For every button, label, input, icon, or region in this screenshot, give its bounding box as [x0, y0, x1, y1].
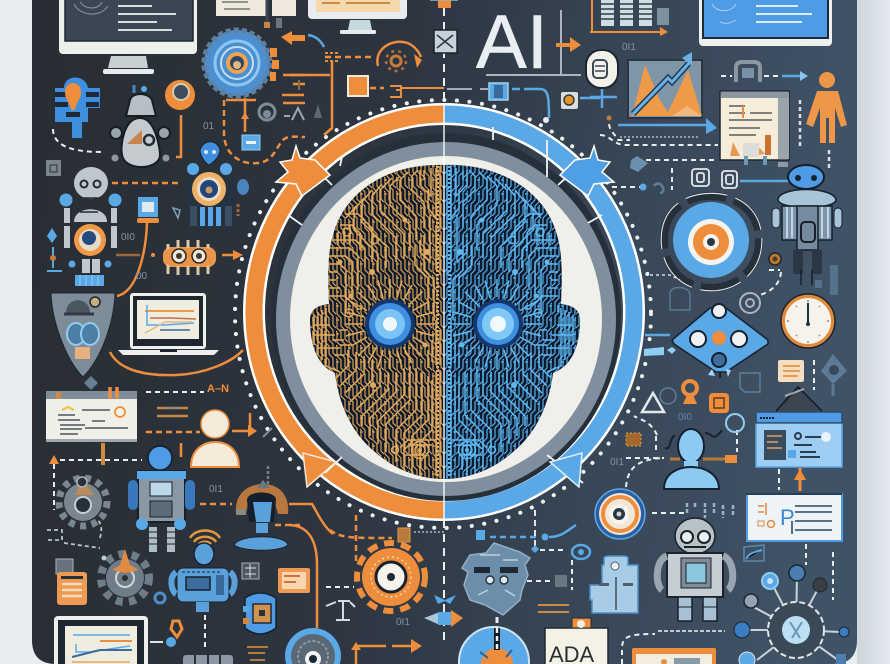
robot: left figure: [47, 167, 135, 286]
orange lines group: [282, 75, 305, 103]
dotted ring around the emblem: [235, 100, 651, 528]
icon: balance: [326, 601, 355, 620]
arrowhead: top right blue: [560, 146, 614, 196]
bar chart: top: [590, 0, 669, 53]
monitor: top centre: [308, 0, 407, 34]
connectors around person: [146, 413, 272, 457]
arrow: beside title: [556, 37, 581, 52]
tile: cream orange: [778, 360, 804, 382]
small dashed path: lower left: [47, 520, 101, 548]
arrowhead: top left orange: [276, 146, 330, 196]
lines: orange: [157, 408, 188, 416]
target: orange: [165, 80, 195, 157]
icon: faint diamond: [821, 354, 847, 396]
icon: small blue chart: [744, 545, 764, 561]
label: 0I1 lower: 0I1: [396, 617, 410, 628]
robot head: blue grey right: [462, 543, 567, 650]
small grey icons and labels: [259, 104, 322, 120]
dashed orange junction: [330, 515, 445, 565]
circuit: right blue half: [444, 160, 584, 485]
gear: grey with orange spike: [101, 549, 165, 603]
circle: small outline: [740, 293, 760, 313]
line: squares to robot: [740, 180, 790, 182]
label: 01: 01: [203, 121, 215, 132]
icon: small grey tile: [46, 160, 61, 176]
curve: under laptop: [110, 350, 243, 375]
icon: small grey table: [242, 563, 259, 579]
box: blue with orange square: [243, 593, 276, 634]
robot: blue right top: [772, 165, 842, 285]
card: white with P: P: [780, 505, 795, 530]
faint icon: pot: [670, 288, 690, 310]
shield: [51, 293, 115, 390]
icon: orange dot tile: [561, 92, 600, 109]
monitor: bottom left: [54, 616, 176, 664]
eye: blue small: [572, 545, 590, 559]
faint icon: right: [815, 265, 838, 295]
chip: small orange: [626, 433, 641, 446]
icon: top orange square: [430, 0, 458, 8]
dashed and arrow between cards: [779, 468, 806, 491]
hub network: [734, 565, 849, 664]
icon: small monitor with curve: [116, 197, 159, 296]
robot: blue bulb icon: [53, 78, 102, 152]
lines: orange blue: [538, 605, 569, 612]
head silhouette: [310, 165, 580, 479]
tile: orange: [709, 393, 729, 413]
squares: above gear: [692, 169, 737, 188]
person: cream: [191, 410, 239, 467]
arrows: bottom orange: [351, 639, 422, 664]
robot: blue with gear: [173, 142, 249, 226]
coin: small orange: [760, 253, 781, 295]
connector: gear to blue box: [224, 98, 305, 163]
centre dashed axis: [443, 8, 445, 640]
dashed verticals right: [800, 100, 829, 168]
doc: orange left bottom: [56, 559, 87, 605]
left eye: [365, 299, 415, 349]
dashed: top blue connector: [476, 510, 576, 590]
blue faint icons: [660, 373, 760, 423]
clipboard: pale blue: [590, 556, 638, 613]
circuit: left orange half: [305, 160, 444, 485]
area chart with rising arrow: [628, 52, 702, 118]
robot: left figure: 0I0: [121, 232, 135, 243]
robot: grey egg: [110, 85, 170, 167]
label: A-N: A–N: [207, 383, 229, 395]
dial: bottom centre: [459, 627, 529, 664]
label: 0I1 right: 0I1: [610, 457, 624, 468]
keyboard: [183, 655, 233, 664]
cream disc: [290, 156, 602, 482]
molecule: blue: [644, 304, 768, 378]
dashed: above label: [146, 391, 204, 393]
dashed chain under grey robot: [622, 631, 725, 664]
triangle: [642, 393, 664, 412]
outer blue band: [444, 103, 645, 521]
icon: x box: [434, 30, 457, 53]
arrow: orange left: [281, 31, 305, 45]
page background right: [857, 0, 890, 664]
monitor: top left: [59, 0, 197, 74]
icon: orange square connector: [348, 76, 444, 97]
gear: orange with eyes: [136, 240, 243, 282]
diamond: orange: [171, 621, 182, 637]
bar chart: top: 0I1: [622, 42, 636, 53]
robot: grey right: [657, 518, 733, 621]
target: orange blue: [595, 489, 645, 539]
curve: blue arc: [308, 35, 324, 47]
right eye: [473, 299, 523, 349]
icon: orange arc gear: [377, 42, 422, 71]
dashed: left of gear: [326, 586, 354, 588]
person: blue: [626, 414, 744, 489]
card: bottom orange: [632, 648, 716, 664]
person: orange: [806, 72, 847, 143]
pin: orange: [683, 381, 697, 404]
arrow: blue wing: [424, 595, 463, 627]
document: right: [720, 91, 789, 167]
card: white with P: [746, 494, 842, 541]
arrowhead: bottom left orange: [303, 453, 336, 487]
dashes beside tile: [813, 360, 815, 390]
faint dashed: right dots: [650, 275, 680, 280]
clock: [781, 294, 835, 348]
orange dashed to gear knob: [290, 53, 372, 135]
monitor: top right blue: [699, 0, 832, 46]
centre axis line: [443, 104, 445, 520]
blue connector: right of axis: [447, 83, 549, 123]
central emblem: [254, 104, 634, 520]
dashed: to head robot: [200, 503, 232, 505]
pill icon: [586, 50, 618, 108]
title: AI: AI: [476, 0, 548, 85]
outer orange band: [243, 103, 444, 521]
robot: blue wifi: [171, 530, 235, 650]
robot: head with orange arch: [234, 466, 333, 550]
card: orange small: [278, 568, 310, 593]
clip handle icon above document: [721, 62, 808, 82]
gear: blue spiral: [204, 30, 279, 96]
dark ring: [271, 133, 621, 501]
document: top: [216, 0, 296, 28]
blue faint icons: 0I0: [678, 412, 692, 423]
gear: grey left: [59, 477, 107, 526]
robot: blue centre left: [128, 446, 195, 552]
gear: orange centre: [357, 543, 425, 611]
card: blue: [756, 387, 842, 467]
connector: card to gear: [49, 443, 142, 510]
curve: long orange down: [290, 525, 317, 628]
dashed lines to hub: [806, 544, 833, 600]
note: ADA: [545, 618, 608, 664]
gear: orange with eyes: 00: [136, 271, 148, 282]
label: 0I1: 0I1: [209, 484, 223, 495]
lines: orange small: [247, 647, 268, 660]
card: left: [46, 387, 137, 442]
grey ring: [276, 142, 616, 496]
gear: target right: [661, 193, 762, 291]
curved dashes: target to person: [626, 458, 733, 518]
radial ticks: [288, 127, 602, 483]
dashed link: robots: [112, 182, 182, 184]
title: AI: [476, 0, 581, 85]
dashed: arrow star to gear: [612, 156, 672, 193]
blue arrow under chart: [600, 116, 718, 160]
laptop: [118, 293, 219, 355]
arrowhead: bottom right blue: [550, 453, 582, 487]
wheel: blue bottom: [285, 628, 341, 664]
